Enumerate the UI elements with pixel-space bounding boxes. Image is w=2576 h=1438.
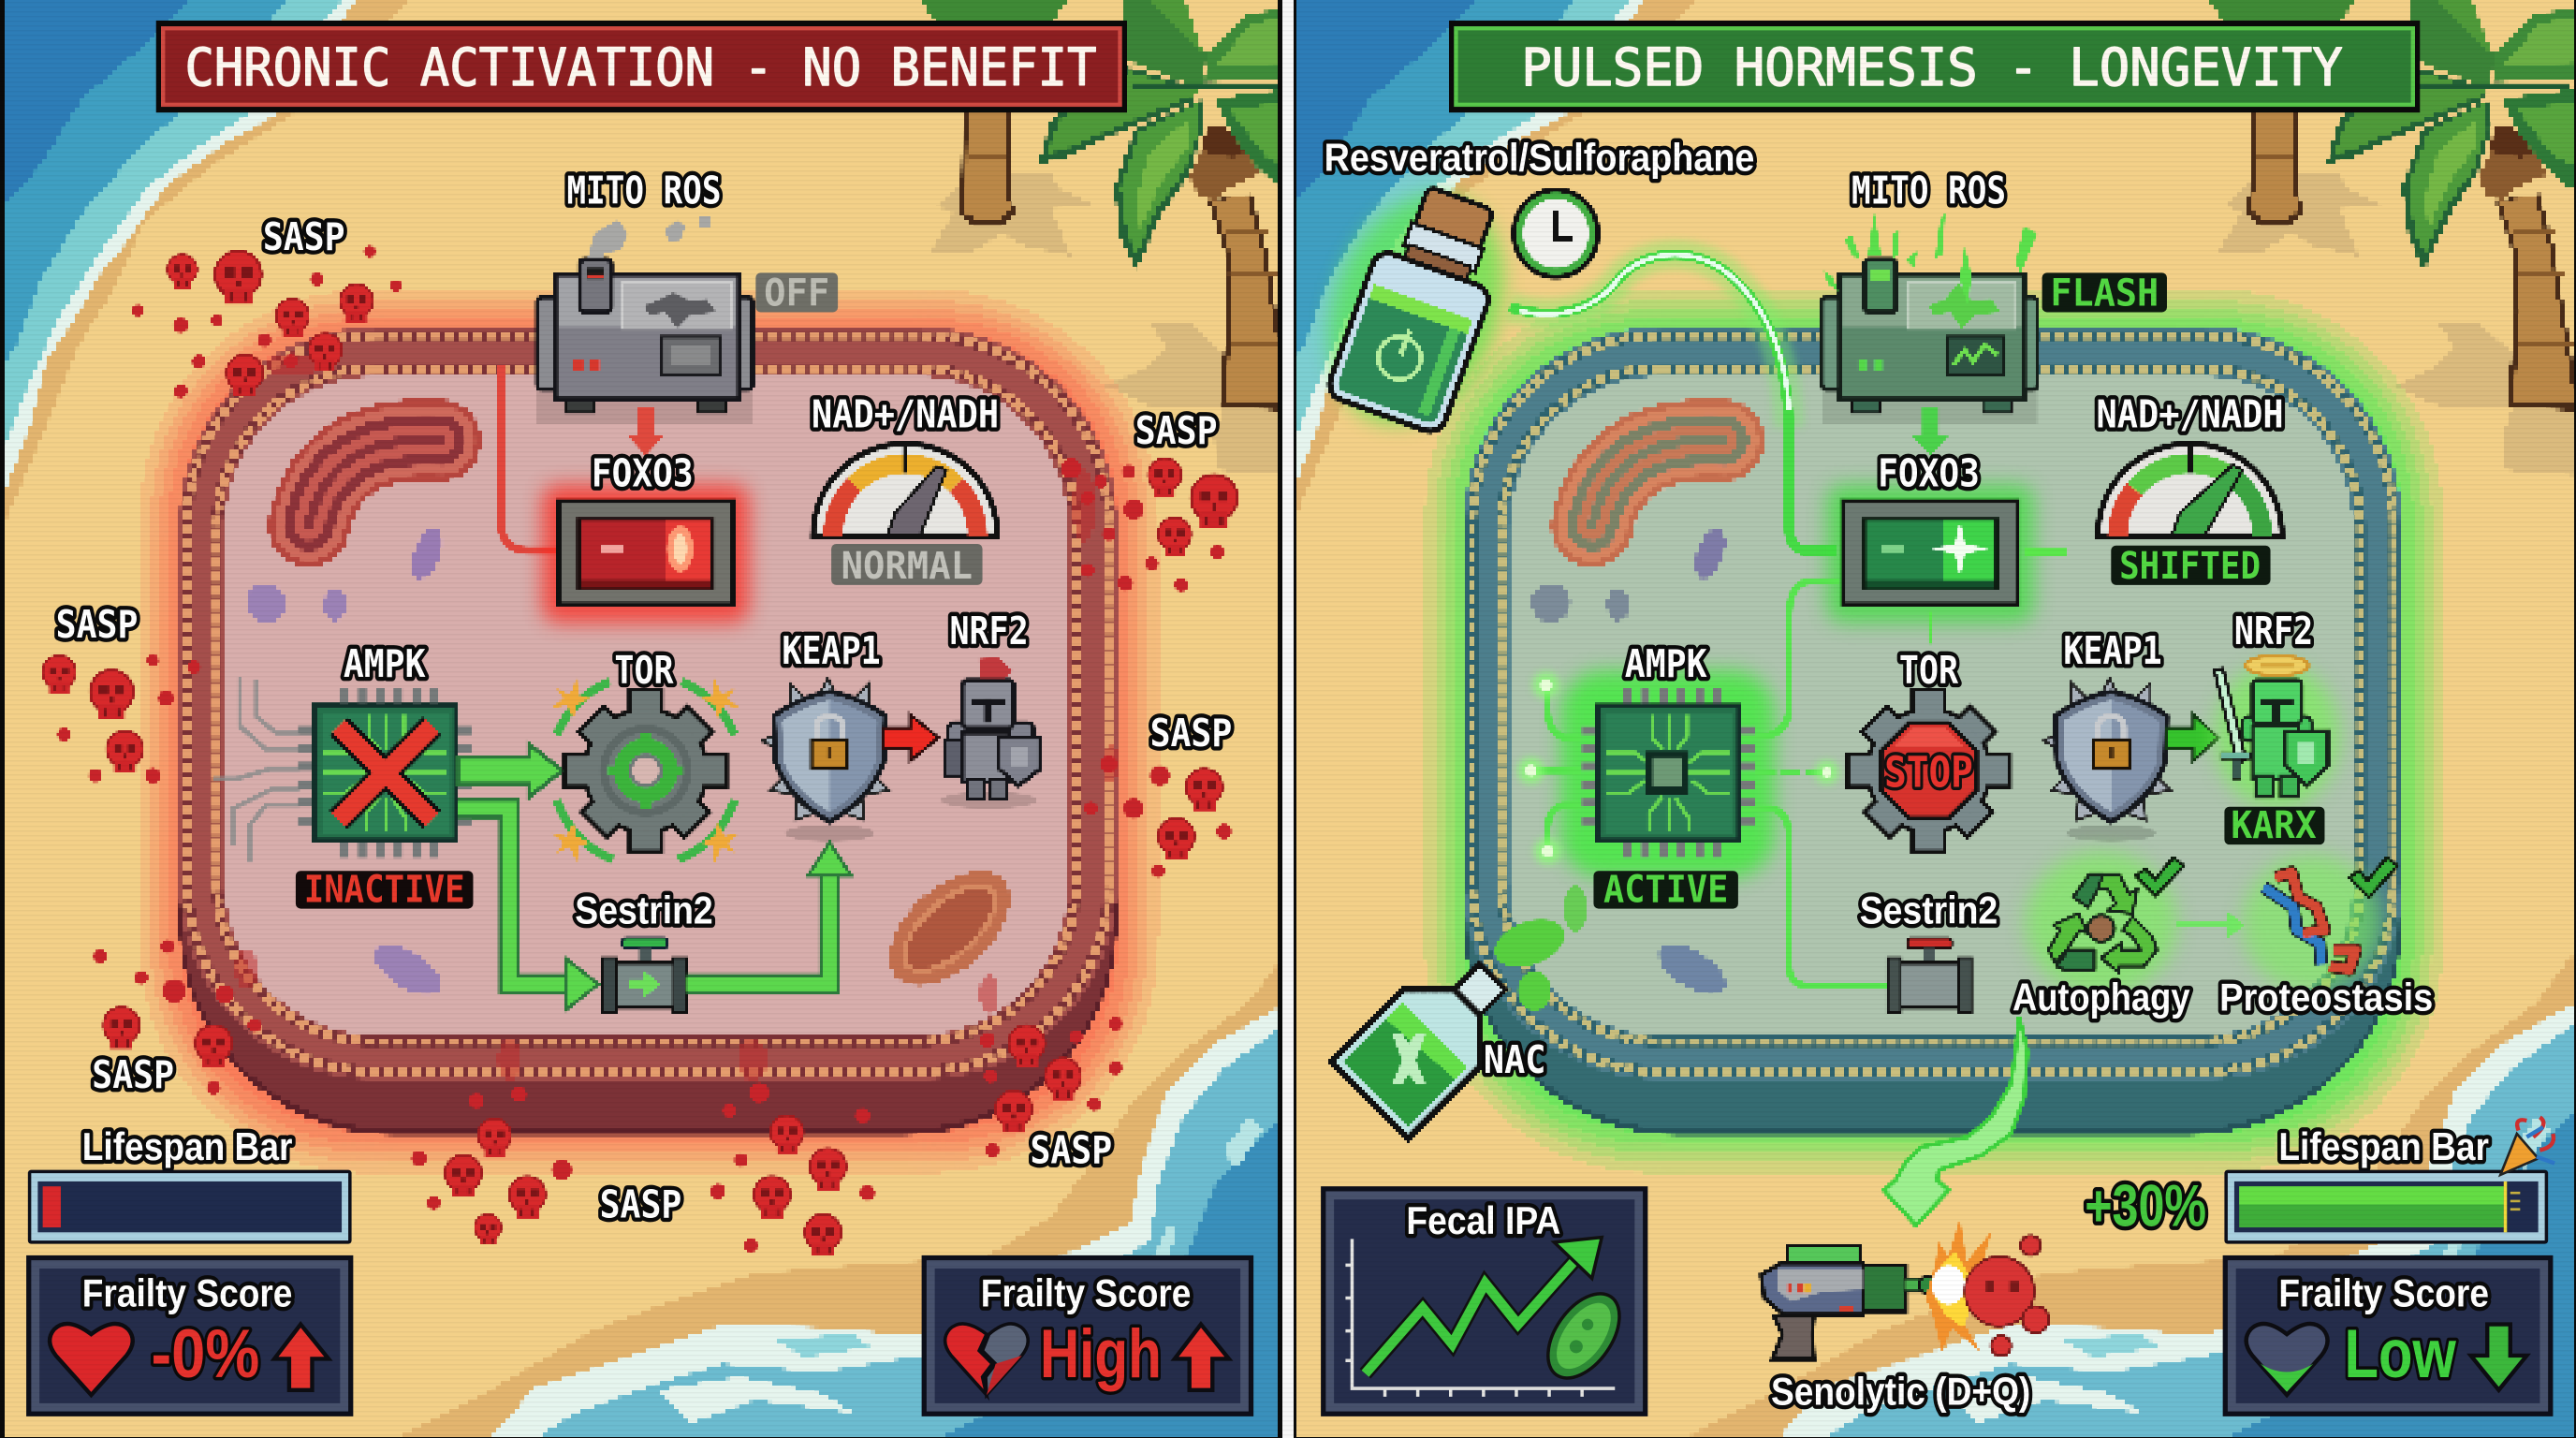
icon: up arrow [1175,1325,1229,1390]
panel: frailty score high: Frailty Score [981,1270,1191,1314]
chart line: rising trend [1365,1238,1602,1373]
icon: NRF2 knight glow [2215,664,2339,809]
panel: frailty score left [26,1255,353,1416]
badge: normal: NORMAL [842,544,973,588]
right scene artwork [1271,0,2576,1438]
icon: FOXO3 switch glow [542,485,749,623]
lifespan bar: extended [2224,1117,2554,1244]
left labels: NAD+/NADH [812,391,999,436]
left labels: SASP [56,602,138,647]
panel: frailty score low [2223,1255,2553,1416]
icon: AMPK chip inactive [213,677,472,861]
beach, sea and palm trees [0,0,1331,1438]
cell green glow [1444,309,2423,1153]
right labels: NRF2 [2234,609,2313,653]
right labels: Resveratrol/Sulforaphane [1325,136,1754,180]
right labels: Senolytic (D+Q) [1771,1370,2030,1414]
left labels: SASP [92,1052,174,1097]
icon: AMPK chip active [1582,688,1754,858]
icon: FOXO3 switch [1843,501,2017,605]
chart axes [1345,1239,1615,1397]
left labels: SASP [1030,1128,1112,1173]
icon: resveratrol sulforaphane bottle [1325,178,1518,435]
left labels [56,169,1232,1227]
organelles [1531,440,1734,1005]
lifespan bar: short [28,1124,352,1244]
icon: TOR gear with stop sign [1850,692,2008,849]
icon: broken heart [945,1324,1028,1395]
effect: resveratrol pulse beam [1510,255,1837,550]
icon: Sestrin2 valve closed [1888,938,1971,1012]
badge: karx: KARX [2231,803,2317,847]
icon: KEAP1 shield [2043,679,2178,842]
right labels: Proteostasis [2219,975,2433,1019]
left molecular icons [43,217,1237,1255]
title banner: pulsed hormesis: PULSED HORMESIS - LONGEVITY [1521,38,2343,98]
icon: smoke [587,217,710,266]
lifespan bar: short: Lifespan Bar [82,1124,292,1168]
right labels: MITO ROS [1852,169,2006,213]
cell red glow [159,309,1138,1153]
icon: Sestrin2 valve open [603,938,687,1012]
left labels: FOXO3 [592,451,694,496]
left labels: Sestrin2 [575,888,713,932]
arrow: machine to FOXO3 [627,407,664,455]
icon: FOXO3 switch glow [1827,485,2034,623]
membrane damage smears [235,353,1119,1081]
icon: proteostasis folded protein [2264,873,2356,970]
title banner: pulsed hormesis [1449,21,2420,112]
panel: pulsed hormesis [1271,0,2576,1438]
arrow: KEAP1 to NRF2 [884,714,938,761]
badge: flash: FLASH [2050,271,2159,315]
icon: FOXO3 switch [559,501,733,605]
title banner: chronic activation [156,21,1127,112]
right labels: KEAP1 [2063,628,2162,673]
arrow: KEAP1 to NRF2 [2167,714,2217,761]
panel: frailty score left: Frailty Score [82,1270,292,1314]
right molecular icons [1298,169,2397,1358]
effect: chip signal traces [1531,581,1889,986]
arrow: Sestrin2 to KEAP1 [687,871,829,984]
panel: fecal IPA chart [1321,1186,1647,1416]
left labels: MITO ROS [567,169,721,213]
wire: red signal to FOXO3 [501,365,562,550]
beach, sea and palm trees [1271,0,2576,1438]
left labels: SASP [263,214,345,259]
icon: mito ros generator flashing [1822,259,2037,424]
effect: bottle glow [1298,169,1534,448]
icon: senolytic ray gun [1761,1245,1936,1358]
arrow: beam to senolytic [1884,1017,2027,1225]
panel: fecal IPA chart: Fecal IPA [1406,1198,1560,1242]
badge: active: ACTIVE [1603,868,1728,912]
effect: FOXO3 stubs [1930,552,2067,644]
icon: recovering heart [2247,1324,2328,1395]
arrow: AMPK through Sestrin2 valve [459,809,568,984]
icon: autophagy recycle [2049,874,2157,973]
icon: party popper [2500,1117,2554,1175]
icon: explosion burst [1925,1219,1991,1351]
right labels [1325,136,2433,1414]
icon: down arrow [2471,1325,2526,1390]
icon: TOR gear [552,679,739,862]
icon: up arrow [274,1325,329,1390]
value: low: Low [2345,1314,2456,1392]
icon: NRF2 knight active [2215,655,2328,797]
left labels: SASP [1150,711,1232,756]
left labels: AMPK [344,641,426,686]
right labels: Sestrin2 [1860,888,1998,932]
badge: shifted: SHIFTED [2119,544,2261,588]
right labels: Autophagy [2012,975,2190,1019]
icon: NRF2 knight inactive [942,657,1040,809]
badge: off: OFF [764,271,829,315]
label: stop sign: STOP [1884,748,1973,798]
arrow: autophagy to proteostasis [2177,912,2244,938]
effect: signal nodes [1518,672,1838,864]
arrow: AMPK to TOR [459,744,562,797]
value: plus thirty percent: +30% [2085,1173,2206,1239]
effect: chip glow [1560,670,1775,877]
left labels: TOR [614,648,674,693]
title banner: chronic activation: CHRONIC ACTIVATION - NO BENEFIT [184,38,1097,98]
icon: NAC splash [1488,886,1587,1010]
SASP particles [57,245,1231,1252]
effect: proteostasis glow [2243,855,2380,992]
panel: chronic activation [0,0,1331,1438]
icon: senescent cell target [1965,1236,2049,1356]
left labels: NRF2 [949,609,1029,653]
icon: NAC bottle [1331,938,1530,1138]
value: minus zero percent: -0% [151,1314,259,1392]
icon: proteostasis check [2349,858,2397,897]
icon: KEAP1 shield [762,679,897,842]
cell membrane and cytoplasm [1464,327,2402,1136]
icon: NAD gauge normal [813,444,997,536]
panel: frailty score high [922,1255,1253,1416]
arrow: machine to FOXO3 [1912,407,1949,455]
effect: flash sparks [1823,213,2037,305]
left scene artwork [0,0,1331,1438]
senescent cells: SASP skulls [43,252,1237,1255]
badge: inactive: INACTIVE [304,868,465,912]
right labels: AMPK [1625,641,1707,686]
right labels: TOR [1899,648,1958,693]
panel: frailty score low: Frailty Score [2278,1270,2489,1314]
centre divider [1282,0,1294,1438]
icon: full heart [50,1324,133,1395]
right labels: NAC [1484,1037,1546,1082]
left labels: SASP [1135,408,1218,453]
organelles [246,440,1031,1007]
right labels: FOXO3 [1878,451,1980,496]
icon: gut bacterium [1533,1281,1634,1391]
value: high: High [1040,1314,1162,1392]
icon: clock [1512,187,1600,279]
icon: autophagy check [2136,858,2184,896]
left labels: KEAP1 [782,628,881,673]
cell membrane and cytoplasm [179,327,1117,1136]
icon: NAD gauge shifted [2098,444,2282,536]
right labels: NAD+/NADH [2097,391,2284,436]
left labels: SASP [600,1182,681,1227]
effect: autophagy glow [2026,851,2177,996]
icon: mito ros generator off [537,259,753,424]
lifespan bar: extended: Lifespan Bar [2278,1124,2489,1168]
